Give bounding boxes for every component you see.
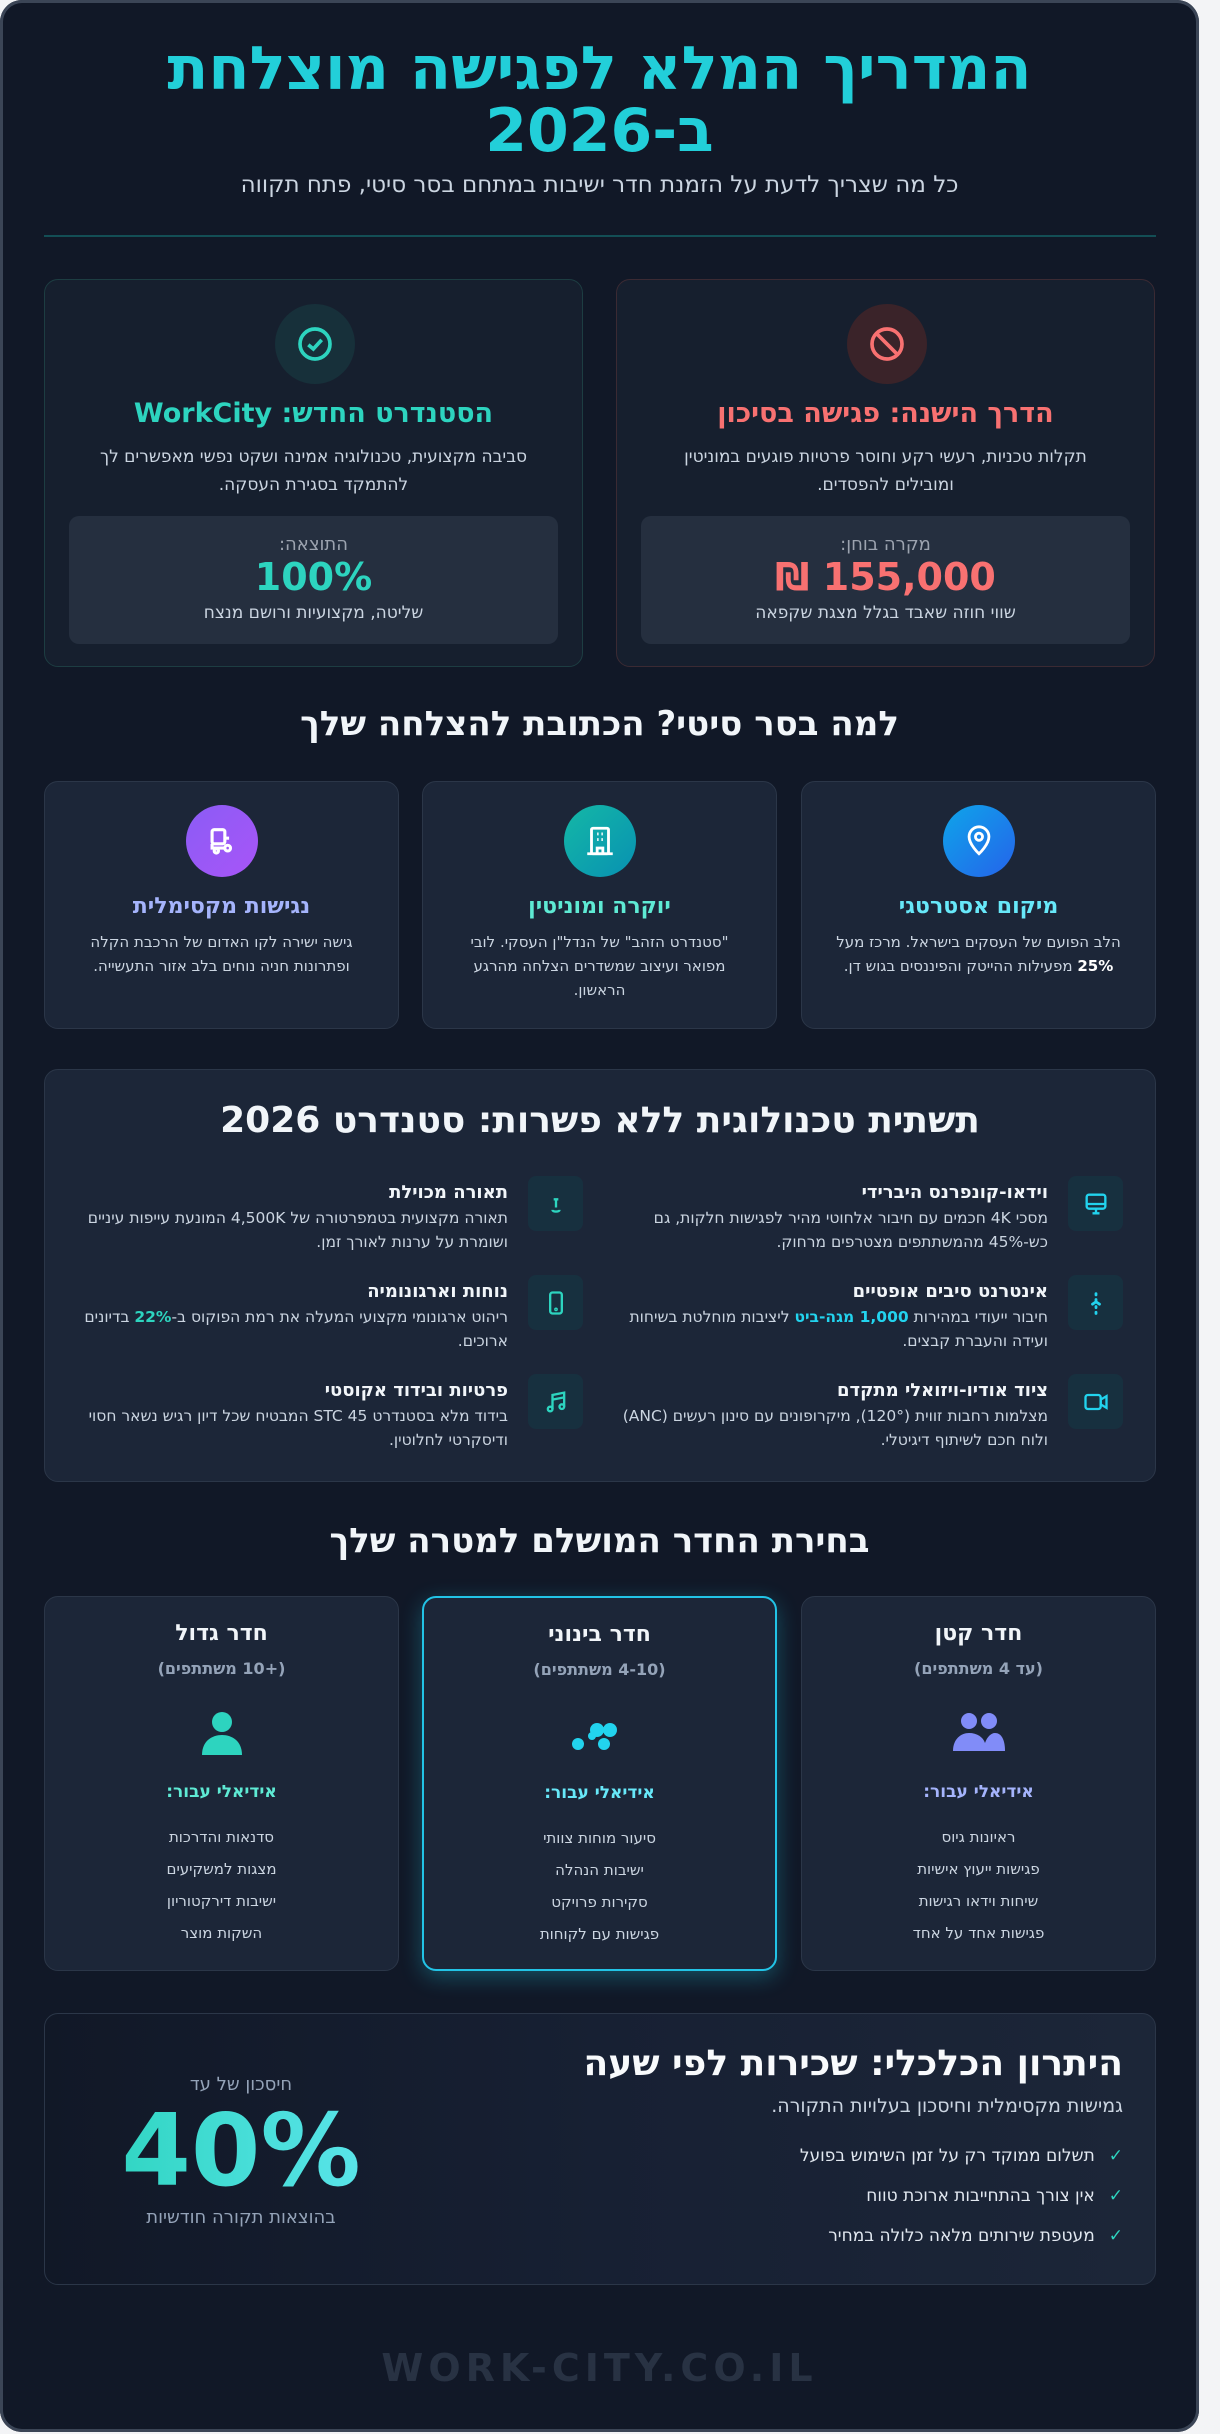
icon: building bbox=[564, 805, 636, 877]
panel: economic advantage bbox=[44, 2013, 1156, 2285]
item: ergonomics: נוחות וארגונומיה bbox=[367, 1281, 508, 1302]
heading: הדרך הישנה: פגישה בסיכון bbox=[717, 398, 1054, 429]
icon: pin bbox=[943, 805, 1015, 877]
item: lighting bbox=[88, 1176, 583, 1251]
item: acoustic: פרטיות ובידוד אקוסטי bbox=[325, 1380, 508, 1401]
case box: מקרה בוחן: bbox=[840, 534, 931, 555]
room: large: (+10 משתתפים) bbox=[158, 1659, 285, 1678]
room: small bbox=[801, 1596, 1156, 1971]
checklist: ✓תשלום ממוקד רק על זמן השימוש בפועל bbox=[800, 2146, 1123, 2166]
room: small: פגישות ייעוץ אישיות bbox=[917, 1860, 1040, 1878]
checklist bbox=[800, 2146, 1123, 2246]
room: medium (highlighted): סקירות פרויקט bbox=[551, 1893, 648, 1911]
text: "סטנדרט הזהב" של הנדל"ן העסקי. לובי מפואר ועיצוב שמשדרים הצלחה מהרגע הראשון. bbox=[471, 933, 728, 999]
panel: technology bbox=[44, 1069, 1156, 1482]
item: fiber bbox=[629, 1275, 1123, 1350]
item: fiber: אינטרנט סיבים אופטיים bbox=[853, 1281, 1048, 1302]
room: large: סדנאות והדרכות bbox=[169, 1828, 274, 1846]
icon: group bbox=[572, 1723, 617, 1750]
description: סביבה מקצועית, טכנולוגיה אמינה ושקט נפשי מאפשרים לך להתמקד בסגירת העסקה. bbox=[100, 447, 527, 495]
room: large: חדר גדול bbox=[175, 1621, 268, 1646]
big stat: 40%: בהוצאות תקורה חודשיות bbox=[146, 2207, 336, 2228]
checklist: ✓אין צורך בהתחייבות ארוכת טווח bbox=[866, 2186, 1123, 2206]
case box: שווי חוזה שאבד בגלל מצגת שקפאה bbox=[755, 603, 1016, 623]
room: large: אידיאלי עבור: bbox=[166, 1782, 277, 1802]
room: small: פגישות אחד על אחד bbox=[913, 1924, 1044, 1942]
room: small: שיחות וידאו רגישות bbox=[919, 1892, 1038, 1910]
text: גישה ישירה לקו האדום של הרכבת הקלה ופתרונות חניה נוחים בלב אזור התעשייה. bbox=[90, 933, 353, 975]
icon: two people bbox=[953, 1713, 1005, 1751]
icon: vehicle bbox=[186, 805, 258, 877]
title: המדריך המלא לפגישה מוצלחת bbox=[167, 34, 1032, 104]
subtitle: כל מה שצריך לדעת על הזמנת חדר ישיבות במתחם בסר סיטי, פתח תקווה bbox=[241, 172, 958, 198]
title: מיקום אסטרטגי bbox=[899, 894, 1058, 919]
panel: new standard bbox=[44, 279, 583, 667]
title: יוקרה ומוניטין bbox=[528, 894, 671, 919]
title: ב-2026 bbox=[485, 96, 714, 166]
room: large: השקות מוצר bbox=[181, 1924, 262, 1942]
feature: accessibility bbox=[44, 781, 399, 1029]
item: video conference: מסכי 4K חכמים עם חיבור אלחוטי מהיר לפגישות חלקות, גם כש-45% מהמשתתפים מצטרפים מרחוק. bbox=[654, 1209, 1048, 1251]
room: large bbox=[44, 1596, 399, 1971]
room: medium (highlighted): חדר בינוני bbox=[548, 1622, 651, 1647]
result box: שליטה, מקצועיות ורושם מנצח bbox=[204, 603, 423, 623]
item: acoustic: בידוד מלא בסטנדרט STC 45 המבטיח שכל דיון רגיש נשאר חסוי ודיסקרטי לחלוטין. bbox=[89, 1407, 508, 1449]
room: medium (highlighted): ישיבות הנהלה bbox=[555, 1861, 644, 1879]
panel: old way (risk) bbox=[616, 279, 1155, 667]
footer: site url: WORK-CITY.CO.IL bbox=[381, 2346, 818, 2390]
heading: הסטנדרט החדש: WorkCity bbox=[134, 398, 493, 429]
big stat: 40%: חיסכון של עד bbox=[190, 2074, 292, 2095]
icon: signal bbox=[1068, 1275, 1123, 1330]
icon: person bbox=[202, 1712, 242, 1755]
icon: ban bbox=[847, 304, 927, 384]
room: medium (highlighted): (4-10 משתתפים) bbox=[533, 1660, 666, 1679]
item: audio-visual: ציוד אודיו-ויזואלי מתקדם bbox=[837, 1380, 1048, 1401]
item: video conference: וידאו-קונפרנס היברידי bbox=[862, 1182, 1048, 1203]
item: audio-visual bbox=[623, 1374, 1123, 1449]
icon: lamp bbox=[528, 1176, 583, 1231]
subheading: גמישות מקסימלית וחיסכון בעלויות התקורה. bbox=[771, 2095, 1123, 2117]
icon: camera bbox=[1068, 1374, 1123, 1429]
feature: location bbox=[801, 781, 1156, 1029]
heading: תשתית טכנולוגית ללא פשרות: סטנדרט 2026 bbox=[220, 1100, 980, 1141]
big stat: 40%: 40% bbox=[121, 2092, 361, 2209]
item: acoustic bbox=[89, 1374, 583, 1449]
room: small: ראיונות גיוס bbox=[941, 1828, 1016, 1846]
section heading: rooms: בחירת החדר המושלם למטרה שלך bbox=[329, 1521, 870, 1561]
heading: היתרון הכלכלי: שכירות לפי שעה bbox=[584, 2043, 1123, 2084]
section heading: why: למה בסר סיטי? הכתובת להצלחה שלך bbox=[300, 704, 899, 744]
result box bbox=[69, 516, 558, 644]
room: small: חדר קטן bbox=[935, 1621, 1022, 1646]
icon: check bbox=[275, 304, 355, 384]
feature: prestige bbox=[422, 781, 777, 1029]
room: small: אידיאלי עבור: bbox=[923, 1782, 1034, 1802]
checklist: ✓מעטפת שירותים מלאה כלולה במחיר bbox=[828, 2226, 1123, 2246]
description: תקלות טכניות, רעשי רקע וחוסר פרטיות פוגעים במוניטין ומובילים להפסדים. bbox=[684, 447, 1087, 495]
title bbox=[167, 34, 1032, 166]
item: fiber: חיבור ייעודי במהירות 1,000 מגה-ביט ליציבות מוחלטת בשיחות ועידה והעברת קבצים. bbox=[629, 1308, 1048, 1350]
item: lighting: תאורה מקצועית בטמפרטורה של 4,500K המונעת עייפות עיניים ושומרת על ערנות לאורך זמן. bbox=[88, 1209, 508, 1251]
item: ergonomics: ריהוט ארגונומי מקצועי המעלה את רמת הפוקוס ב-22% בדיונים ארוכים. bbox=[84, 1308, 508, 1350]
item: audio-visual: מצלמות רחבות זווית (120°), מיקרופונים עם סינון רעשים (ANC) ולוח חכם לשיתוף דיגיטלי. bbox=[623, 1407, 1048, 1449]
icon: monitor bbox=[1068, 1176, 1123, 1231]
item: video conference bbox=[654, 1176, 1123, 1251]
result box: 100% bbox=[255, 555, 372, 599]
result box: התוצאה: bbox=[279, 534, 348, 555]
room: medium (highlighted) bbox=[422, 1596, 777, 1971]
case box: ₪ 155,000 bbox=[775, 555, 996, 599]
room: small: (עד 4 משתתפים) bbox=[914, 1659, 1043, 1678]
text: הלב הפועם של העסקים בישראל. מרכז מעל 25% מפעילות ההייטק והפיננסים בגוש דן. bbox=[836, 933, 1121, 975]
icon: tablet bbox=[528, 1275, 583, 1330]
room: large: ישיבות דירקטוריון bbox=[167, 1892, 276, 1910]
item: ergonomics bbox=[84, 1275, 583, 1350]
item: lighting: תאורה מכוילת bbox=[389, 1182, 508, 1203]
room: large: מצגות למשקיעים bbox=[166, 1860, 277, 1878]
room: medium (highlighted): פגישות עם לקוחות bbox=[540, 1925, 659, 1943]
room: medium (highlighted): סיעור מוחות צוותי bbox=[543, 1829, 656, 1847]
room: medium (highlighted): אידיאלי עבור: bbox=[544, 1783, 655, 1803]
title: נגישות מקסימלית bbox=[133, 894, 310, 919]
case box bbox=[641, 516, 1130, 644]
icon: music bbox=[528, 1374, 583, 1429]
